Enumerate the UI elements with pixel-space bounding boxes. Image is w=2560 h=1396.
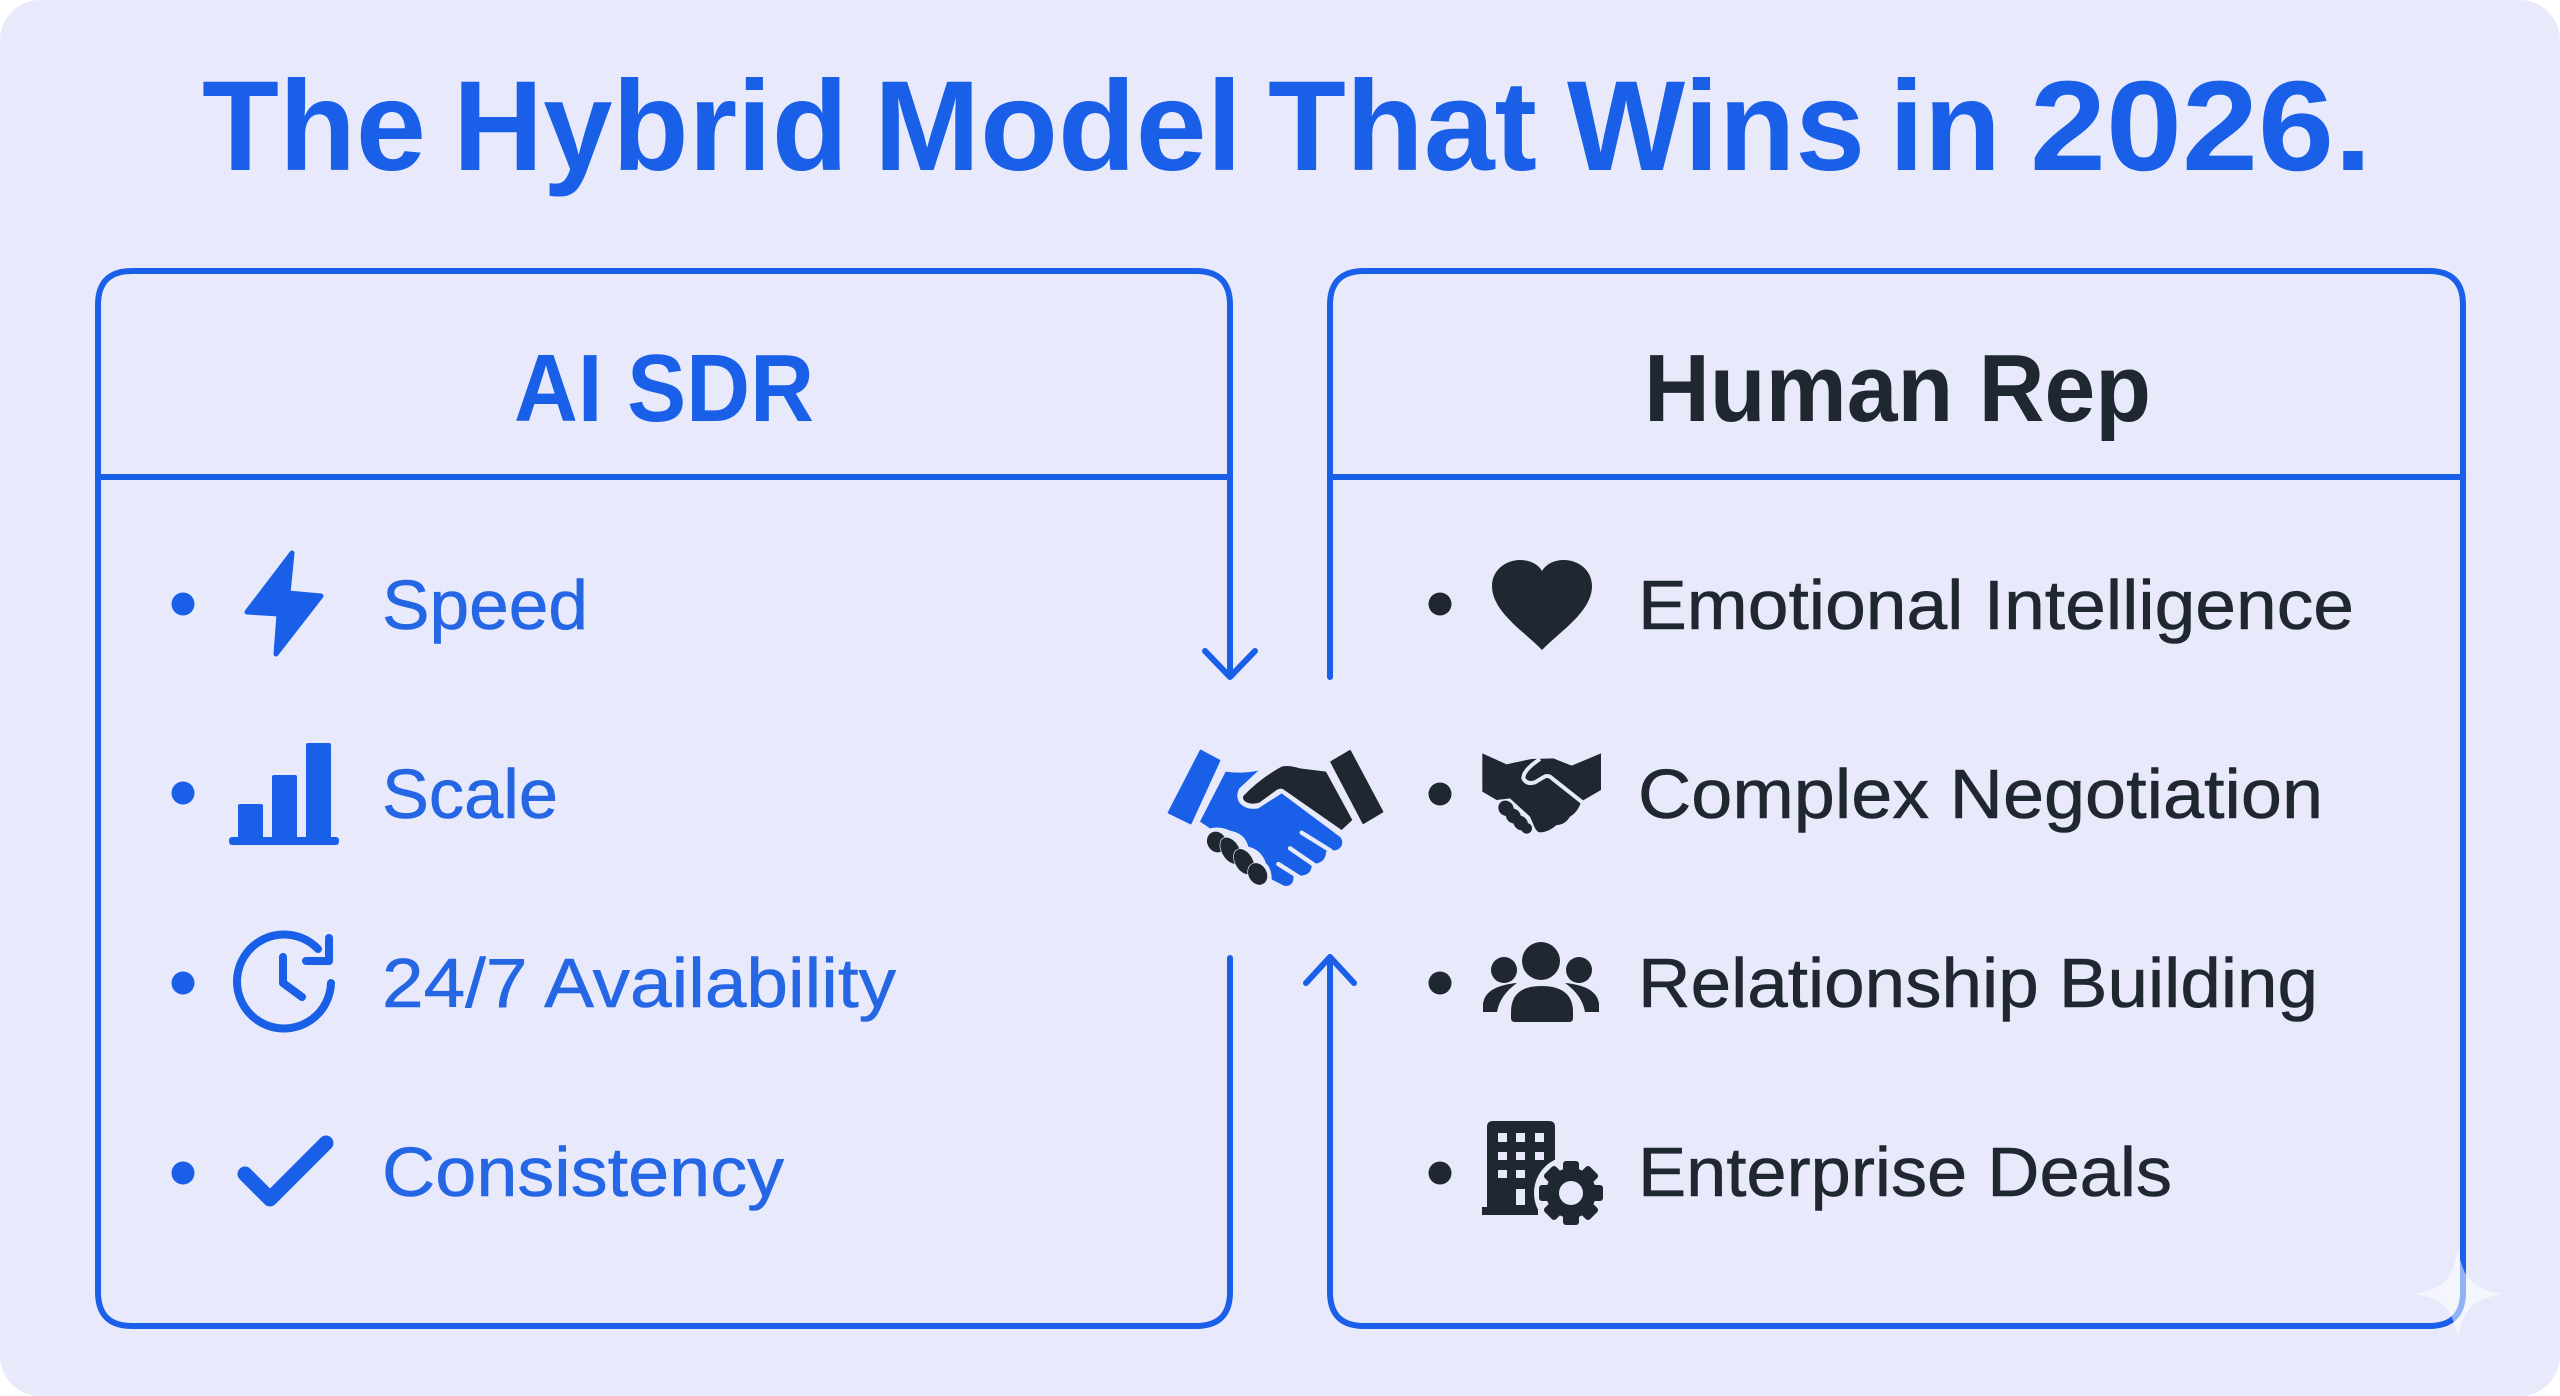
- title: Hybrid: [453, 55, 848, 198]
- item: 24/7 Availability: [172, 934, 896, 1028]
- title: in: [1889, 55, 2001, 198]
- icon: central handshake: [1169, 751, 1382, 889]
- item: Relationship Building: Relationship Building: [1638, 944, 2318, 1022]
- item: Consistency: Consistency: [382, 1133, 784, 1211]
- item: Enterprise Deals: Enterprise Deals: [1638, 1133, 2172, 1211]
- item: Speed: [172, 553, 588, 654]
- watermark sparkle: [2415, 1250, 2502, 1338]
- item: Scale: Scale: [382, 755, 558, 833]
- panel outline with down arrow: [98, 271, 1255, 1326]
- item: Speed: Speed: [382, 566, 588, 644]
- panel outline with up arrow: [1306, 271, 2463, 1326]
- title: [202, 55, 2372, 198]
- item: Complex Negotiation: Complex Negotiation: [1638, 755, 2323, 833]
- item: 24/7 Availability: 24/7 Availability: [382, 944, 896, 1022]
- title: 2026.: [2030, 55, 2372, 198]
- panel: AI SDR: [98, 271, 1255, 1326]
- panel: Human Rep: [1306, 271, 2463, 1326]
- title: Wins: [1567, 55, 1865, 198]
- heading: AI SDR: AI SDR: [514, 335, 814, 442]
- item: Consistency: [172, 1133, 784, 1211]
- item: Emotional Intelligence: [1428, 560, 2354, 650]
- item: Enterprise Deals: [1428, 1121, 2172, 1230]
- title: That: [1268, 55, 1537, 198]
- title: Model: [874, 55, 1242, 198]
- item: Scale: [172, 743, 558, 845]
- item: Emotional Intelligence: Emotional Intelligence: [1638, 566, 2354, 644]
- heading: Human Rep: Human Rep: [1644, 335, 2151, 442]
- title: The: [202, 55, 426, 198]
